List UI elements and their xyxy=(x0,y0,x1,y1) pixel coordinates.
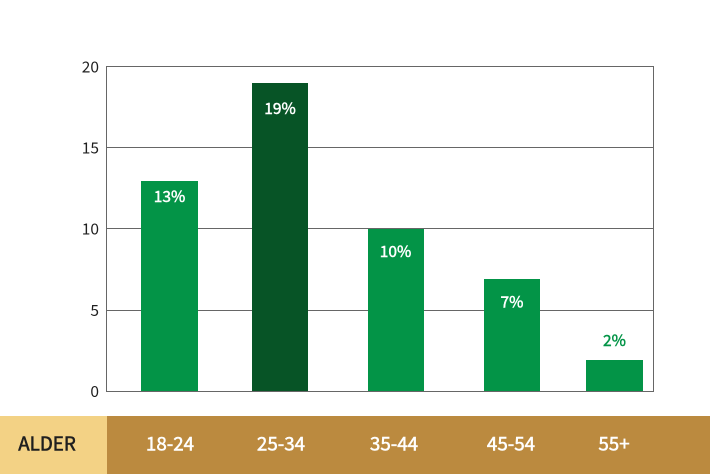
age category band: 55+ xyxy=(598,430,630,456)
bar: 35-44 10% xyxy=(368,229,424,392)
y axis labels: 15 xyxy=(82,136,99,158)
bar: 18-24 13%: 13% xyxy=(154,185,185,207)
age category band: 25-34 xyxy=(257,430,305,456)
label cell: ALDER xyxy=(0,416,107,474)
age category band: 35-44 xyxy=(370,430,418,456)
bar: 18-24 13% xyxy=(141,181,198,392)
y axis labels: 20 xyxy=(82,56,99,78)
age category band xyxy=(107,416,710,474)
y axis labels: 5 xyxy=(90,299,99,321)
bar: 25-34 19% xyxy=(252,83,308,392)
bar: 45-54 7%: 7% xyxy=(501,290,523,312)
bar: 55+ 2% xyxy=(586,329,643,392)
bar: 55+ 2%: 2% xyxy=(603,329,626,351)
bar: 35-44 10%: 10% xyxy=(380,240,411,262)
y axis labels: 10 xyxy=(82,218,99,240)
bar: 25-34 19%: 19% xyxy=(264,97,296,119)
age category band: 45-54 xyxy=(487,430,535,456)
y axis labels xyxy=(82,56,99,402)
label cell: ALDER: ALDER xyxy=(18,430,76,456)
bar: 45-54 7% xyxy=(484,279,540,392)
age category band: 18-24 xyxy=(146,430,194,456)
y axis labels: 0 xyxy=(90,380,99,402)
